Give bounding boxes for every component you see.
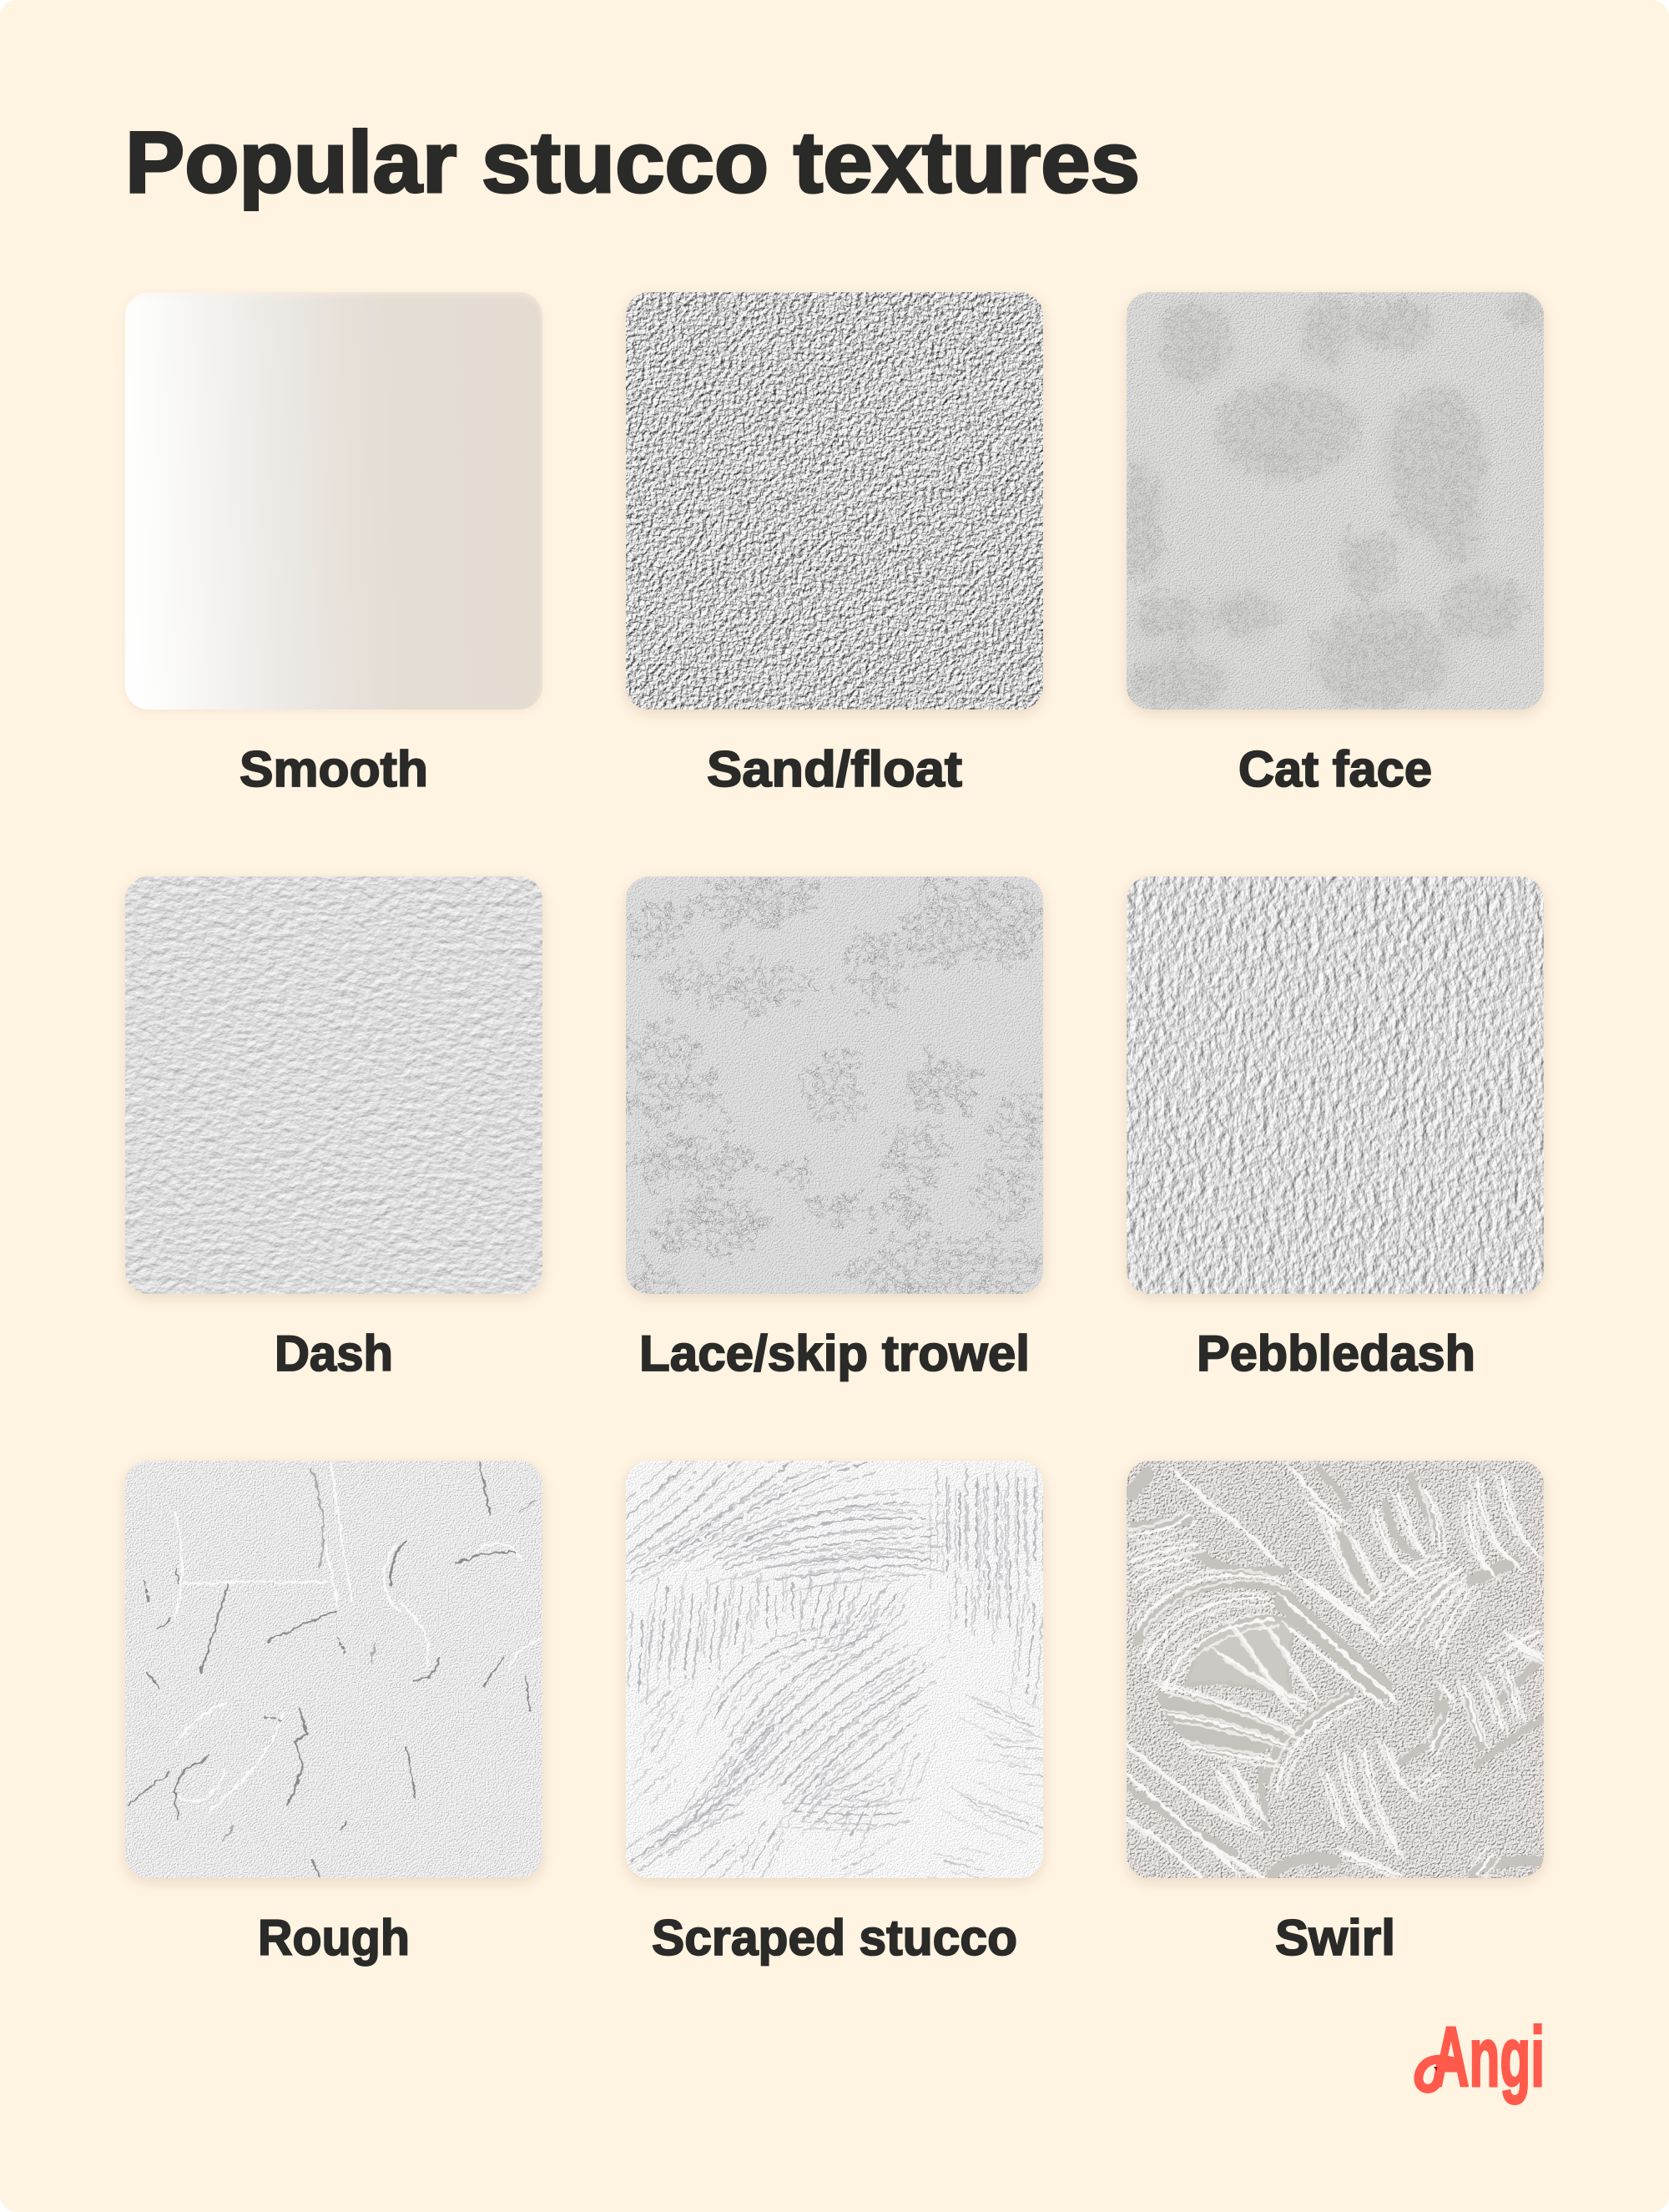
- texture: pebbledash: [1127, 876, 1544, 1294]
- title: Popular stucco textures: [125, 114, 1140, 211]
- label: Scraped stucco: Scraped stucco: [652, 1910, 1017, 1966]
- label: Cat face: Cat face: [1238, 741, 1432, 797]
- icon: logo loop: [1419, 2058, 1456, 2088]
- texture: dash: [125, 876, 542, 1294]
- panel: cat face: [1122, 292, 1548, 797]
- texture: smooth gradient: [125, 292, 542, 710]
- panel: scraped stucco: [622, 1461, 1047, 1967]
- panel: lace/skip trowel: [622, 876, 1047, 1382]
- panel: sand/float: [622, 292, 1047, 797]
- label: Sand/float: Sand/float: [707, 741, 962, 797]
- texture: cat face: [1127, 292, 1544, 710]
- texture: lace skip trowel: [626, 876, 1043, 1294]
- texture: swirl: [1127, 1461, 1544, 1878]
- label: Pebbledash: Pebbledash: [1197, 1326, 1475, 1381]
- label: Smooth: Smooth: [240, 741, 428, 797]
- panel: pebbledash: [1122, 876, 1548, 1381]
- panel: dash: [121, 876, 547, 1381]
- label: Swirl: Swirl: [1275, 1910, 1395, 1966]
- label: Dash: Dash: [275, 1326, 393, 1381]
- label: Lace/skip trowel: Lace/skip trowel: [639, 1326, 1030, 1381]
- texture: scraped stucco: [626, 1461, 1043, 1878]
- texture: rough: [125, 1461, 542, 1878]
- texture: sand float: [626, 292, 1043, 710]
- panel: swirl: [1122, 1461, 1548, 1966]
- label: Rough: Rough: [258, 1910, 410, 1966]
- panel: smooth: [125, 292, 542, 797]
- panel: rough: [121, 1461, 547, 1967]
